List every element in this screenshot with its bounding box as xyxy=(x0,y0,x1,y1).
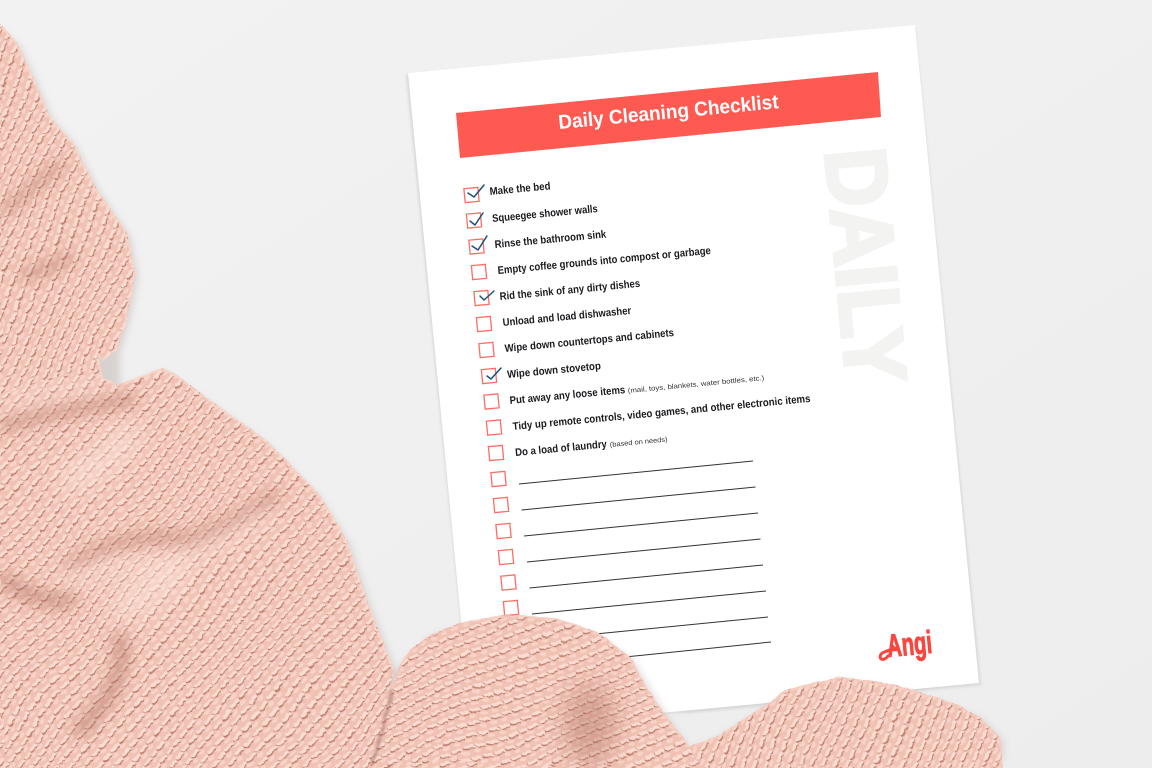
main piece highlights xyxy=(5,380,270,605)
lump rim xyxy=(388,615,690,747)
logo swoosh xyxy=(879,646,894,660)
checklist text: Unload and load dishwasher xyxy=(502,305,632,329)
checklist text: Make the bed xyxy=(489,180,551,198)
checklist text: Wipe down stovetop xyxy=(507,360,602,381)
right lump rim xyxy=(690,677,1003,768)
heading banner xyxy=(456,72,881,158)
title: Daily Cleaning Checklist xyxy=(557,91,780,134)
checklist text: Tidy up remote controls, video games, and other electronic items xyxy=(512,393,811,433)
checklist text: Put away any loose items xyxy=(509,384,626,407)
checklist text: Squeegee shower walls xyxy=(492,203,598,225)
checklist text: Rinse the bathroom sink xyxy=(494,228,608,251)
blanket right lump xyxy=(690,676,1002,768)
checklist text: Wipe down countertops and cabinets xyxy=(504,327,675,355)
blanket main piece xyxy=(0,0,420,768)
checklist text: Empty coffee grounds into compost or garbage xyxy=(497,245,711,277)
logo: Angi: Angi xyxy=(885,624,933,664)
lump shading xyxy=(564,683,616,767)
watermark: DAILY: DAILY xyxy=(806,144,924,388)
checklist text: Rid the sink of any dirty dishes xyxy=(499,278,641,303)
checklist checkboxes xyxy=(464,187,519,616)
paper shadow xyxy=(406,27,981,713)
main piece rim xyxy=(2,25,393,668)
checklist text xyxy=(489,180,811,459)
checklist text: Do a load of laundry xyxy=(515,438,607,459)
main piece shading xyxy=(5,165,275,730)
check marks xyxy=(468,185,501,379)
blanket dark crease xyxy=(372,690,392,766)
checklist text: (based on needs) xyxy=(610,437,668,449)
paper sheet xyxy=(408,25,979,713)
logo: Angi xyxy=(877,624,933,665)
checklist text: (mail, toys, blankets, water bottles, etc.) xyxy=(628,375,765,395)
blank write-in lines xyxy=(519,461,771,666)
blanket lower lump xyxy=(370,614,700,768)
